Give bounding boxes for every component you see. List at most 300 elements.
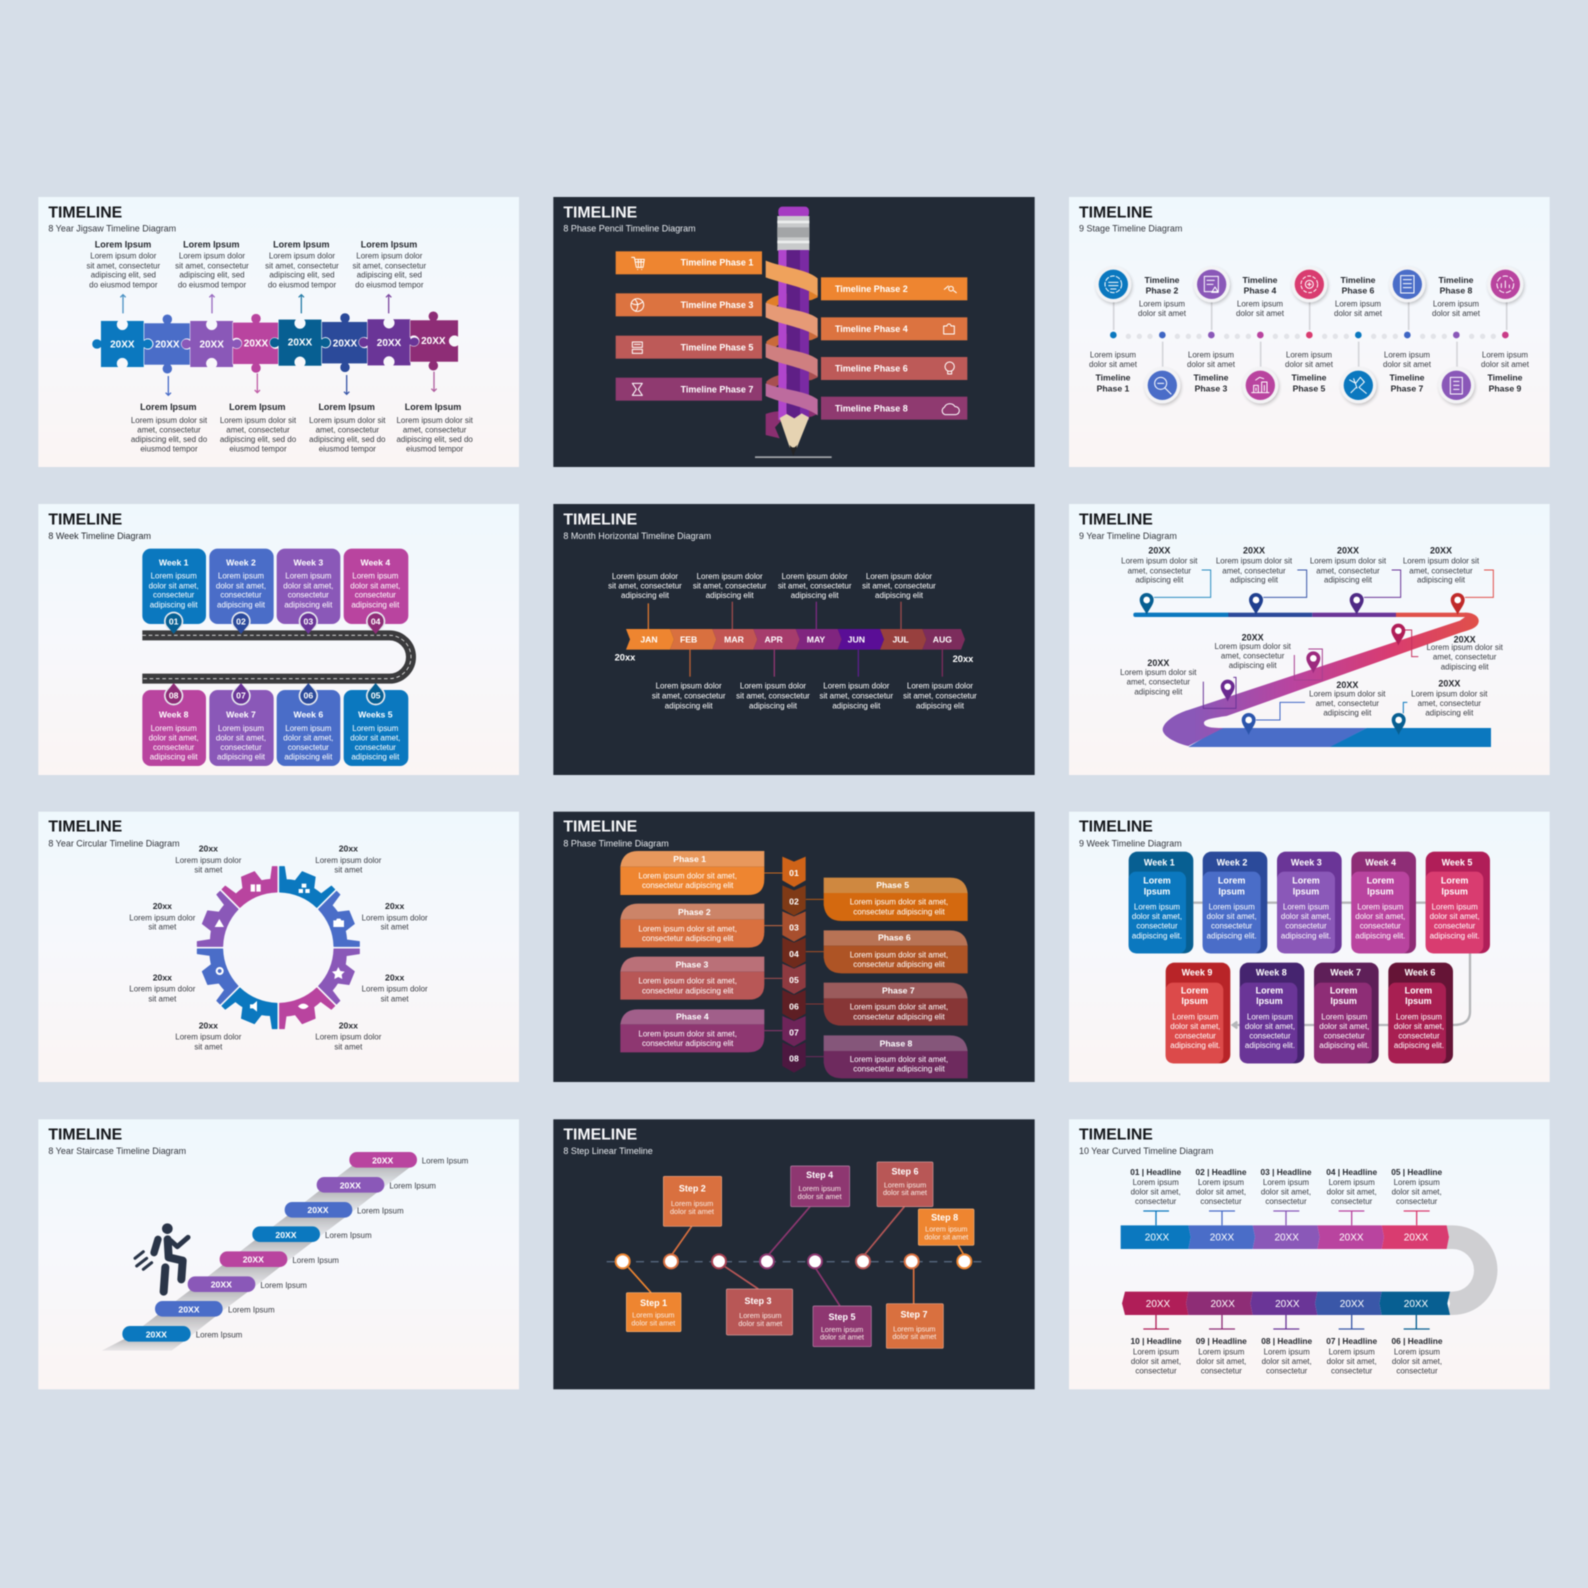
upper headlines: consectetur [1331, 1197, 1373, 1206]
year captions: Lorem ipsum dolor [362, 913, 428, 922]
step boxes: Step 3 [745, 1296, 771, 1306]
year captions: adipiscing elit [1323, 709, 1372, 718]
right phase cards: Lorem ipsum dolor sit amet, [850, 1055, 948, 1064]
lower pins: 08 [169, 691, 179, 701]
year captions: Lorem ipsum dolor sit [1309, 689, 1386, 698]
lower week cards: Week 8 [1256, 968, 1287, 978]
year captions: amet, consectetur [1221, 652, 1285, 661]
piece 8: 20XX [421, 336, 446, 347]
year labels: 20XX [1210, 1299, 1235, 1310]
upper descriptions: adipiscing elit [875, 591, 924, 600]
upper week cards: Lorem ipsum [1432, 902, 1478, 911]
right phase bars [821, 277, 967, 420]
piece 3: 20XX [199, 340, 224, 351]
phase labels: Phase 8 [1440, 286, 1473, 296]
lower week cards: Lorem ipsum [1321, 1012, 1368, 1021]
year captions: sit amet [148, 994, 177, 1003]
year captions: amet, consectetur [1316, 699, 1379, 708]
lower captions: adipiscing elit, sed do [220, 435, 297, 444]
lower headlines: dolor sit amet, [1392, 1357, 1442, 1366]
lower headlines: dolor sit amet, [1131, 1357, 1181, 1366]
lower week cards: adipiscing elit. [1394, 1041, 1444, 1050]
lower captions: amet, consectetur [403, 426, 467, 435]
upper captions: do eiusmod tempor [355, 280, 424, 289]
piece 6 [322, 313, 368, 372]
bar: phase 7: Timeline Phase 7 [681, 384, 753, 394]
upper week cards: adipiscing elit [217, 600, 266, 609]
phase labels: Timeline [1096, 373, 1131, 383]
upper week cards: Week 3 [1291, 858, 1322, 868]
lower week cards: dolor sit amet, [283, 734, 333, 743]
month labels: APR [765, 635, 784, 645]
lower captions: amet, consectetur [316, 426, 379, 435]
year captions: Lorem ipsum dolor sit [1403, 557, 1480, 566]
phase labels: Timeline [1292, 373, 1327, 383]
year captions: 20xx [199, 844, 218, 854]
gear icons [215, 884, 345, 1012]
upper week cards: adipiscing elit [150, 600, 198, 609]
step boxes: Step 7 [901, 1309, 927, 1319]
phase labels: dolor sit amet [1187, 360, 1236, 369]
bar: phase 1: Timeline Phase 1 [681, 258, 753, 268]
year captions: 20XX [1337, 545, 1359, 555]
month labels: AUG [933, 635, 952, 645]
lower descriptions: Lorem ipsum dolor [740, 682, 806, 691]
step boxes: Lorem ipsum [893, 1324, 936, 1333]
phase labels: Phase 9 [1489, 383, 1522, 393]
panel: 8 month horizontal timeline [553, 504, 1035, 775]
lower descriptions: Lorem ipsum dolor [656, 682, 722, 691]
connector lines [648, 602, 942, 677]
bar: phase 8 [821, 397, 967, 420]
upper headlines: Lorem ipsum [1133, 1178, 1179, 1187]
year captions: sit amet [334, 1042, 363, 1051]
step boxes: dolor sit amet [738, 1319, 782, 1328]
phase labels: Phase 2 [1146, 286, 1179, 296]
piece 8 [410, 311, 458, 371]
panel: 8 phase timeline cards [553, 812, 1035, 1082]
lower headlines: 08 | Headline [1261, 1336, 1312, 1346]
step boxes: Lorem ipsum [671, 1199, 713, 1208]
left phase cards: Lorem ipsum dolor sit amet, [638, 977, 737, 986]
lower headlines [1131, 1336, 1443, 1375]
year pills: Lorem Ipsum [196, 1331, 243, 1340]
title: TIMELINE [563, 819, 637, 836]
lower pins: 07 [236, 691, 246, 701]
numbered chevron column: 05 [789, 975, 799, 985]
left phase cards: Phase 1 [673, 854, 706, 864]
left phase cards: consectetur adipiscing elit [642, 986, 734, 995]
lower week cards: consectetur [288, 743, 329, 752]
upper week cards: Lorem [1441, 876, 1468, 886]
year labels: 20XX [1210, 1233, 1235, 1244]
upper week cards: dolor sit amet, [283, 581, 333, 590]
phase labels: Phase 4 [1244, 286, 1277, 296]
numbered chevron column: 04 [789, 949, 799, 959]
year captions: Lorem ipsum dolor [315, 856, 382, 865]
step boxes: Step 2 [679, 1184, 706, 1194]
phase labels: Lorem ipsum [1237, 299, 1283, 308]
year captions: amet, consectetur [1433, 653, 1497, 662]
lower week cards: Week 7 [1330, 968, 1361, 978]
lower week cards: Lorem ipsum [1396, 1012, 1442, 1021]
phase labels: Phase 6 [1342, 286, 1375, 296]
lower week cards: Lorem [1330, 985, 1357, 995]
bar: phase 6 [821, 357, 967, 380]
bar: phase 8: Timeline Phase 8 [835, 403, 908, 413]
upper captions [86, 239, 426, 289]
year captions: amet, consectetur [1418, 699, 1481, 708]
node circles [616, 1254, 971, 1268]
upper week cards: Lorem ipsum [218, 572, 264, 581]
upper captions: do eiusmod tempor [178, 280, 247, 289]
subtitle: 8 Week Timeline Diagram [48, 531, 151, 541]
phase labels: dolor sit amet [1432, 309, 1481, 318]
lower week cards: consectetur [1249, 1031, 1291, 1040]
upper descriptions: Lorem ipsum dolor [782, 572, 848, 581]
bar: phase 6: Timeline Phase 6 [835, 364, 908, 374]
lower week cards: dolor sit amet, [216, 734, 266, 743]
lower week cards: consectetur [355, 743, 396, 752]
panel: 8 step linear timeline [553, 1119, 1035, 1389]
lower week cards: Lorem [1405, 985, 1432, 995]
upper week cards: consectetur [1136, 922, 1178, 931]
upper headlines: Lorem ipsum [1394, 1178, 1440, 1187]
upper week cards: consectetur [1211, 922, 1253, 931]
lower headlines: Lorem ipsum [1264, 1347, 1310, 1356]
lower captions: eiusmod tempor [406, 445, 464, 454]
year labels: 20XX [1404, 1233, 1429, 1244]
year captions: 20XX [1438, 679, 1460, 689]
lower week cards: Week 6 [293, 710, 323, 720]
dashed axis [607, 1260, 982, 1264]
phase labels: Timeline [1390, 373, 1425, 383]
lower captions: adipiscing elit, sed do [309, 435, 386, 444]
numbered chevron column: 06 [789, 1001, 799, 1011]
lower captions: Lorem ipsum dolor sit [131, 416, 208, 425]
lower headlines: dolor sit amet, [1196, 1357, 1246, 1366]
lower descriptions: sit amet, consectetur [903, 692, 977, 701]
grey connector dots [1126, 334, 1496, 339]
lower descriptions: adipiscing elit [832, 701, 881, 710]
upper week cards: Week 3 [293, 557, 323, 567]
lower week cards: adipiscing elit. [1170, 1041, 1220, 1050]
year captions: 20XX [1242, 633, 1264, 643]
piece 7 [359, 319, 419, 366]
numbered chevron column [782, 857, 806, 1073]
phase labels: Phase 5 [1293, 383, 1326, 393]
lower headlines: consectetur [1135, 1366, 1177, 1375]
upper week cards: Week 2 [226, 557, 256, 567]
year pills: 20XX [275, 1230, 297, 1240]
upper captions: do eiusmod tempor [89, 280, 158, 289]
upper week cards: consectetur [153, 591, 195, 600]
lower headlines: 09 | Headline [1196, 1336, 1247, 1346]
panel: 10 year curved timeline [1069, 1119, 1550, 1389]
title: TIMELINE [48, 204, 122, 221]
subtitle: 8 Year Staircase Timeline Diagram [48, 1146, 186, 1156]
step boxes: Lorem ipsum [884, 1180, 926, 1189]
left phase cards: Phase 4 [676, 1012, 709, 1022]
step boxes: Step 8 [931, 1212, 958, 1222]
arrows up and down [120, 295, 437, 395]
right phase cards: Lorem ipsum dolor sit amet, [850, 1003, 948, 1012]
year pills: 20XX [307, 1205, 329, 1215]
bottom chevrons [1122, 1292, 1450, 1315]
lower week cards: adipiscing elit [150, 753, 198, 762]
phase labels: Timeline [1488, 373, 1523, 383]
lower week cards: Ipsum [1405, 996, 1432, 1006]
numbered chevron column: 01 [789, 868, 799, 878]
left phase cards: Phase 2 [678, 907, 711, 917]
subtitle: 9 Year Timeline Diagram [1079, 531, 1177, 541]
upper week cards [1129, 852, 1490, 953]
year captions: amet, consectetur [1128, 566, 1191, 575]
lower headlines: Lorem ipsum [1329, 1347, 1375, 1356]
upper week cards: Lorem ipsum [1357, 902, 1404, 911]
year captions: Lorem ipsum dolor sit [1310, 557, 1387, 566]
year captions: sit amet [334, 865, 363, 874]
phase labels: Phase 1 [1097, 383, 1130, 393]
year captions: adipiscing elit [1324, 576, 1373, 585]
lower week cards: consectetur [1324, 1031, 1365, 1040]
ribbon front sections [766, 261, 818, 415]
year pills [122, 1152, 469, 1342]
panel: 9 stage timeline [1069, 197, 1550, 467]
upper week cards: Lorem [1143, 876, 1171, 886]
step boxes: dolor sit amet [670, 1207, 714, 1216]
upper headlines: Lorem ipsum [1263, 1178, 1309, 1187]
year captions: sit amet [381, 923, 409, 932]
location pins [1140, 593, 1465, 735]
pencil [777, 207, 809, 456]
year captions: 20XX [1454, 634, 1476, 644]
T-shaped tick marks [1143, 1211, 1430, 1329]
year labels: 20XX [1340, 1299, 1365, 1310]
left phase bars [616, 251, 762, 401]
month labels: JUL [892, 635, 910, 645]
bar: phase 7 [616, 378, 762, 401]
step boxes: dolor sit amet [883, 1188, 927, 1197]
bar: phase 1 [616, 251, 762, 274]
lower week cards: adipiscing elit [351, 753, 400, 762]
upper week cards: adipiscing elit [351, 600, 400, 609]
lower descriptions: Lorem ipsum dolor [823, 682, 890, 691]
upper week cards: adipiscing elit. [1207, 931, 1257, 940]
lower captions: Lorem ipsum dolor sit [396, 416, 474, 425]
phase labels: Lorem ipsum [1090, 350, 1136, 359]
year captions: Lorem ipsum dolor [129, 985, 196, 994]
lower captions: Lorem ipsum dolor sit [309, 416, 386, 425]
step boxes: Lorem ipsum [925, 1225, 968, 1234]
year pills: Lorem Ipsum [422, 1157, 469, 1166]
upper week cards [142, 549, 408, 624]
year captions: adipiscing elit [1230, 576, 1279, 585]
year labels [615, 653, 974, 664]
top track [1133, 613, 1466, 617]
lower week cards: Lorem ipsum [1247, 1012, 1293, 1021]
bar: phase 2: Timeline Phase 2 [835, 284, 908, 294]
upper captions: Lorem Ipsum [273, 239, 330, 249]
lower captions: Lorem ipsum dolor sit [220, 416, 297, 425]
month labels: JUN [848, 635, 865, 645]
lower week cards: Ipsum [1330, 996, 1357, 1006]
year pills: 20XX [340, 1180, 361, 1190]
lower headlines: consectetur [1396, 1366, 1438, 1375]
year labels: 20XX [1275, 1299, 1300, 1310]
subtitle: 8 Year Jigsaw Timeline Diagram [48, 224, 176, 234]
road [142, 635, 411, 679]
upper headlines: Lorem ipsum [1198, 1178, 1244, 1187]
lower week cards: adipiscing elit [217, 753, 266, 762]
year captions: amet, consectetur [1409, 566, 1473, 575]
year pills: Lorem Ipsum [292, 1256, 339, 1265]
phase labels: dolor sit amet [1138, 309, 1187, 318]
year pills: Lorem Ipsum [389, 1182, 436, 1191]
lower week cards [142, 690, 408, 766]
phase labels: Lorem ipsum [1482, 350, 1528, 359]
year captions: adipiscing elit [1135, 576, 1184, 585]
panel: 8 year jigsaw timeline [38, 197, 519, 467]
year pills: Lorem Ipsum [228, 1306, 275, 1315]
lower descriptions: Lorem ipsum dolor [907, 682, 973, 691]
upper week cards: consectetur [220, 591, 262, 600]
upper captions: adipiscing elit, sed [179, 271, 245, 280]
year captions: Lorem ipsum dolor sit [1411, 689, 1488, 698]
upper captions: adipiscing elit, sed [357, 271, 422, 280]
left phase cards: Phase 3 [676, 959, 709, 969]
year captions: adipiscing elit [1229, 661, 1277, 670]
upper week cards: Week 5 [1442, 858, 1472, 868]
upper week cards: Ipsum [1441, 886, 1468, 896]
lower week cards: consectetur [153, 743, 195, 752]
step boxes: dolor sit amet [820, 1333, 864, 1342]
phase labels: Lorem ipsum [1139, 299, 1185, 308]
title: TIMELINE [1079, 819, 1153, 836]
step boxes: dolor sit amet [924, 1233, 968, 1242]
lower captions: Lorem Ipsum [318, 402, 375, 412]
lower week cards: adipiscing elit [284, 753, 333, 762]
piece 2: 20XX [155, 340, 180, 351]
step boxes: Step 5 [829, 1312, 855, 1322]
right phase cards: consectetur adipiscing elit [853, 1065, 945, 1074]
title: TIMELINE [563, 511, 637, 528]
upper descriptions: adipiscing elit [791, 591, 839, 600]
year captions: adipiscing elit [1425, 709, 1474, 718]
step boxes: Lorem ipsum [739, 1311, 782, 1320]
upper pins: 03 [304, 616, 313, 626]
year captions: Lorem ipsum dolor sit [1121, 557, 1198, 566]
upper week cards: consectetur [355, 591, 396, 600]
upper captions: adipiscing elit, sed [269, 271, 335, 280]
phase labels: Timeline [1243, 275, 1278, 285]
lower week cards: Week 8 [159, 710, 189, 720]
piece 1: 20XX [110, 340, 135, 351]
step boxes: Step 4 [806, 1170, 833, 1180]
upper descriptions: Lorem ipsum dolor [866, 572, 932, 581]
piece 4: 20XX [244, 338, 269, 349]
bar: phase 4: Timeline Phase 4 [835, 324, 908, 334]
upper week cards: Ipsum [1293, 886, 1319, 896]
year pills: 20XX [243, 1255, 264, 1265]
upper captions: Lorem ipsum dolor [90, 252, 157, 261]
gear ring segments [181, 851, 375, 1045]
upper week cards: Lorem ipsum [285, 572, 332, 581]
panel: 8 year staircase timeline [38, 1119, 519, 1389]
upper captions: Lorem Ipsum [361, 239, 417, 249]
phase labels: Timeline [1439, 275, 1474, 285]
upper week cards: Lorem ipsum [1134, 902, 1180, 911]
piece 6: 20XX [333, 338, 358, 349]
step boxes [626, 1162, 974, 1348]
lower headlines: 06 | Headline [1392, 1336, 1443, 1346]
upper headlines: consectetur [1265, 1197, 1307, 1206]
lower captions: adipiscing elit, sed do [396, 435, 473, 444]
phase labels: Lorem ipsum [1286, 350, 1332, 359]
bar: phase 3 [616, 293, 762, 316]
upper captions: sit amet, consectetur [265, 261, 339, 270]
year pills: 20XX [146, 1329, 167, 1339]
lower captions: Lorem Ipsum [140, 402, 197, 412]
step boxes: Step 1 [640, 1298, 667, 1308]
lower captions: amet, consectetur [226, 426, 290, 435]
phase labels: dolor sit amet [1383, 360, 1432, 369]
year labels: 20XX [1145, 1233, 1170, 1244]
year captions: adipiscing elit [1417, 576, 1466, 585]
lower descriptions: sit amet, consectetur [736, 692, 810, 701]
phase labels: dolor sit amet [1481, 360, 1530, 369]
upper headlines: 01 | Headline [1130, 1167, 1181, 1177]
lower week cards: Week 6 [1405, 968, 1435, 978]
stair shadows [102, 1163, 416, 1351]
right phase cards: Lorem ipsum dolor sit amet, [850, 898, 948, 907]
lower headlines: Lorem ipsum [1198, 1347, 1245, 1356]
year pills: 20XX [372, 1155, 393, 1165]
panel: 9 year winding road timeline [1069, 504, 1550, 775]
icon: running figure [135, 1223, 188, 1292]
phase labels: Lorem ipsum [1433, 299, 1479, 308]
left phase cards [620, 851, 764, 1052]
lower week cards: Lorem ipsum [218, 724, 264, 733]
right phase cards [824, 878, 968, 1078]
connector lines [1154, 570, 1493, 720]
lower week cards: Ipsum [1181, 996, 1208, 1006]
lower week cards: dolor sit amet, [1245, 1022, 1295, 1031]
lower week cards [1166, 963, 1453, 1063]
upper week cards: Week 4 [1365, 858, 1396, 868]
year pills: 20XX [178, 1304, 200, 1314]
panel: 8 week road timeline [38, 504, 519, 775]
lower captions: Lorem Ipsum [405, 402, 461, 412]
numbered chevron column: 02 [789, 897, 799, 907]
year labels: 20XX [1274, 1233, 1299, 1244]
lower pins [164, 683, 385, 705]
year labels: 20xx [953, 654, 974, 664]
subtitle: 9 Stage Timeline Diagram [1079, 224, 1182, 234]
winding ribbon [1163, 613, 1479, 746]
upper pins: 02 [236, 616, 246, 626]
panel: 8 year circular timeline [38, 812, 519, 1082]
upper headlines [1130, 1167, 1442, 1206]
phase labels: Phase 7 [1391, 383, 1424, 393]
month labels: JAN [640, 635, 658, 645]
upper headlines: Lorem ipsum [1329, 1178, 1375, 1187]
year captions: 20XX [1336, 680, 1358, 690]
bar: phase 2 [821, 277, 967, 300]
upper headlines: dolor sit amet, [1327, 1188, 1377, 1197]
upper week cards: Lorem ipsum [1283, 902, 1329, 911]
year captions: Lorem ipsum dolor [175, 1033, 242, 1042]
